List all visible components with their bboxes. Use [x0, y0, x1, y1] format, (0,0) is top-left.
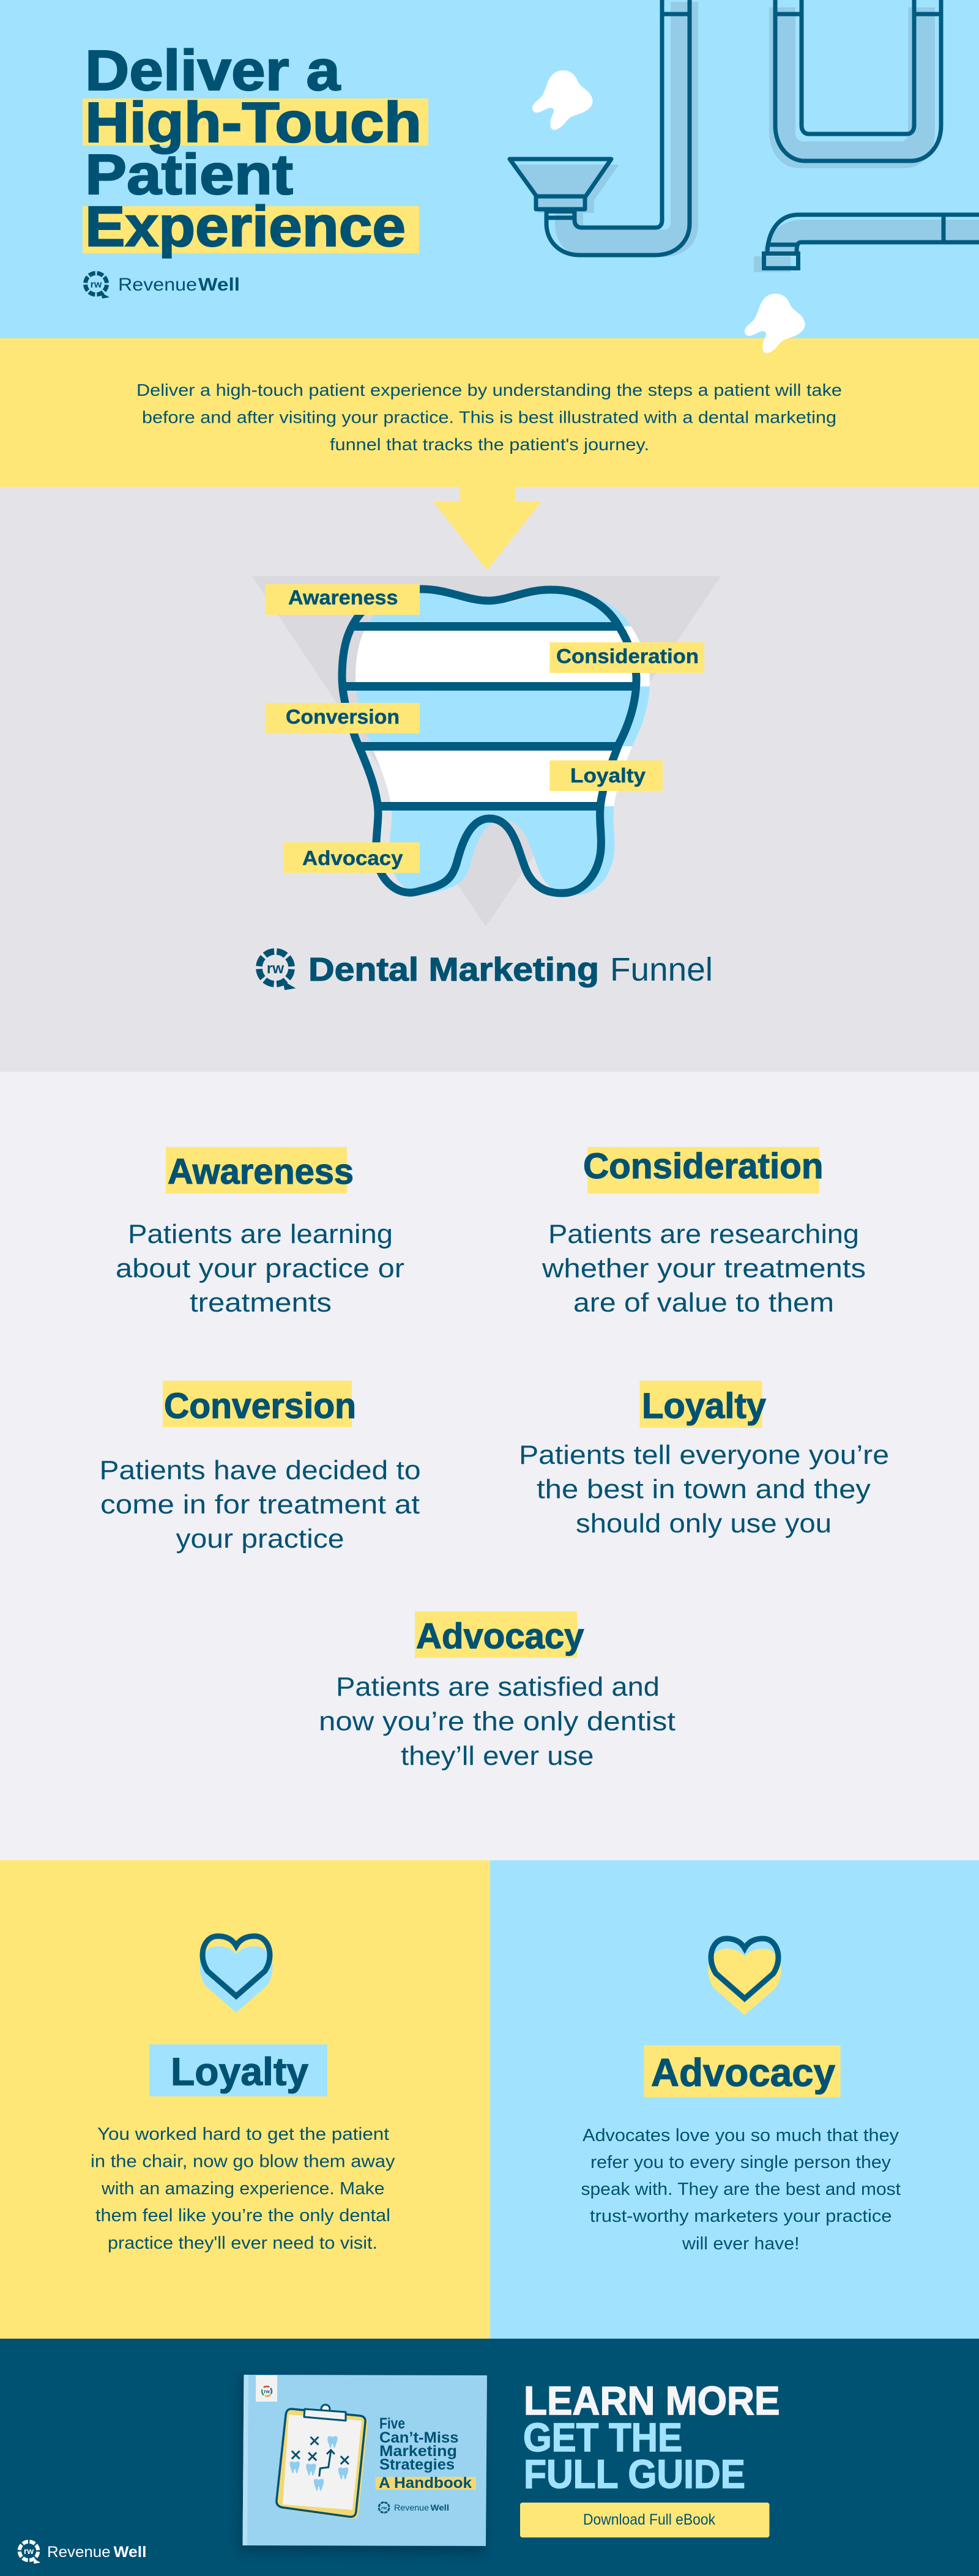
text: Loyalty description: [91, 2125, 395, 2253]
stage: Loyalty: Loyalty: [642, 1386, 766, 1426]
panel: funnel diagram: [0, 464, 979, 1072]
cover title: Can’t-Miss: [379, 2429, 459, 2446]
funnel title with logo: rw: [267, 960, 284, 977]
heading: Advocacy: Advocacy: [651, 2051, 835, 2095]
intro text: before and after visiting your practice. This is best illustrated with a dental marketing: [142, 407, 836, 427]
icon: funnel and left pipe: [510, 0, 698, 257]
text: Advocacy description: speak with. They are the best and most: [581, 2180, 901, 2199]
footer logo: RevenueWell white: rw: [24, 2546, 34, 2556]
cover logo: rw: [381, 2505, 387, 2511]
panel: Advocacy detail: [490, 1860, 979, 2339]
cover logo: Revenue: [394, 2503, 429, 2512]
label: Advocacy: Advocacy: [302, 847, 403, 869]
footer logo: RevenueWell white: Revenue: [47, 2544, 110, 2561]
text: Advocacy description: trust-worthy marketers your practice: [590, 2207, 892, 2226]
headline: learn more: [523, 2378, 780, 2496]
title: Patient: [85, 143, 293, 206]
footer logo: RevenueWell white: [20, 2542, 147, 2564]
cover title: A Handbook: [379, 2474, 472, 2492]
footer logo: RevenueWell white: Well: [114, 2544, 147, 2561]
funnel triangle: [252, 576, 721, 927]
text: Advocacy description: will ever have!: [682, 2234, 799, 2254]
icon: advocacy heart: [711, 1939, 778, 2011]
headline: learn more: FULL GUIDE: [524, 2451, 745, 2496]
cover logo tab: [256, 2375, 277, 2402]
label: Consideration: Consideration: [556, 645, 699, 667]
label: Consideration: [549, 642, 704, 673]
heading: Loyalty: Loyalty: [171, 2049, 308, 2093]
label: Conversion: [266, 703, 420, 733]
label: Awareness: Awareness: [288, 586, 398, 609]
cover title: [376, 2415, 476, 2492]
stage: Awareness: about your practice or: [116, 1253, 404, 1283]
stage: Consideration: [542, 1146, 866, 1318]
stage: Conversion: Conversion: [164, 1386, 356, 1426]
icon: white tooth above funnel: [532, 70, 592, 130]
stage: Awareness: Patients are learning: [128, 1219, 393, 1249]
stage: Loyalty: should only use you: [576, 1509, 832, 1539]
label: Loyalty: Loyalty: [570, 764, 646, 787]
label: Conversion: Conversion: [286, 705, 400, 728]
book shadow: [239, 2377, 485, 2555]
stage: Consideration: are of value to them: [573, 1288, 834, 1318]
stage: Conversion: Patients have decided to: [99, 1455, 421, 1485]
title: Experience: [85, 195, 406, 258]
button: download: Download Full eBook: [583, 2511, 715, 2528]
text: Loyalty description: with an amazing experience. Make: [101, 2179, 384, 2199]
intro text: funnel that tracks the patient's journey.: [330, 435, 649, 454]
panel: hero header: [0, 0, 979, 339]
stage: Conversion: come in for treatment at: [100, 1490, 420, 1520]
stage: Advocacy: Patients are satisfied and: [336, 1672, 660, 1702]
button: download: [520, 2503, 770, 2537]
stage: Advocacy: they’ll ever use: [401, 1741, 594, 1771]
title: Deliver a: [85, 39, 341, 102]
text: Advocacy description: refer you to every single person they: [590, 2153, 892, 2172]
stage: Consideration: Consideration: [583, 1146, 824, 1186]
text: Loyalty description: them feel like you’re the only dental: [95, 2206, 390, 2225]
logo: RevenueWell: Revenue: [118, 275, 197, 295]
icon: faucet pipe: [754, 215, 979, 272]
stage: Loyalty: Patients tell everyone you’re: [519, 1440, 889, 1470]
cover logo tab: rw: [264, 2389, 270, 2394]
stage: Loyalty: the best in town and they: [537, 1474, 871, 1504]
stage: Advocacy: [319, 1611, 676, 1771]
title: High-Touch: [85, 91, 422, 154]
intro text: [136, 380, 842, 454]
cover title: Five: [379, 2415, 405, 2432]
text: Advocacy description: [581, 2126, 901, 2254]
logo: RevenueWell: Well: [198, 275, 240, 295]
heading: Loyalty: [149, 2044, 327, 2096]
headline: learn more: GET THE: [523, 2415, 682, 2460]
panel: funnel stage definitions: [0, 1072, 979, 1861]
stage: Advocacy: Advocacy: [416, 1616, 584, 1657]
stage: Consideration: whether your treatments: [542, 1253, 866, 1283]
intro text: Deliver a high-touch patient experience by understanding the steps a patient will take: [136, 380, 842, 399]
stage: Conversion: [99, 1381, 421, 1554]
cover title: Marketing: [379, 2443, 457, 2460]
logo: RevenueWell: rw: [91, 280, 102, 290]
stage: Advocacy: now you’re the only dentist: [319, 1707, 676, 1736]
panel: footer call to action: [0, 2339, 979, 2576]
stage: Awareness: [116, 1147, 404, 1318]
headline: learn more: LEARN MORE: [524, 2378, 780, 2423]
icon: loyalty heart: [203, 1936, 270, 2009]
arrow pointing down: [433, 464, 542, 570]
title highlight bars: [83, 98, 428, 253]
panel: Loyalty detail: [0, 1860, 490, 2339]
cover logo: [379, 2503, 449, 2512]
logo: RevenueWell: [86, 273, 240, 299]
cover logo: Well: [431, 2503, 449, 2512]
funnel title with logo: [259, 951, 713, 990]
text: Advocacy description: Advocates love you so much that they: [583, 2126, 899, 2145]
title: [85, 39, 422, 258]
label: Loyalty: [549, 760, 663, 791]
icon: U-shaped pipe: [769, 0, 941, 168]
tooth illustration: [338, 585, 650, 897]
text: Loyalty description: in the chair, now go blow them away: [91, 2152, 395, 2172]
label: Awareness: [266, 584, 420, 615]
text: Loyalty description: practice they'll ever need to visit.: [108, 2233, 378, 2253]
icon: clipboard with play diagram: [277, 2405, 368, 2518]
icon: white tooth falling from faucet: [745, 294, 805, 353]
funnel title with logo: Funnel: [610, 951, 713, 988]
text: Loyalty description: You worked hard to get the patient: [97, 2125, 389, 2144]
cover title: Strategies: [379, 2456, 455, 2473]
stage: Awareness: Awareness: [168, 1152, 354, 1192]
stage: Loyalty: [519, 1381, 889, 1539]
panel: intro band: [0, 338, 979, 487]
ebook cover: [242, 2375, 487, 2546]
label: Advocacy: [283, 842, 420, 873]
funnel title with logo: Dental Marketing: [308, 951, 599, 988]
stage: Awareness: treatments: [190, 1288, 332, 1318]
stage: Conversion: your practice: [176, 1524, 344, 1554]
stage: Consideration: Patients are researching: [548, 1219, 859, 1249]
